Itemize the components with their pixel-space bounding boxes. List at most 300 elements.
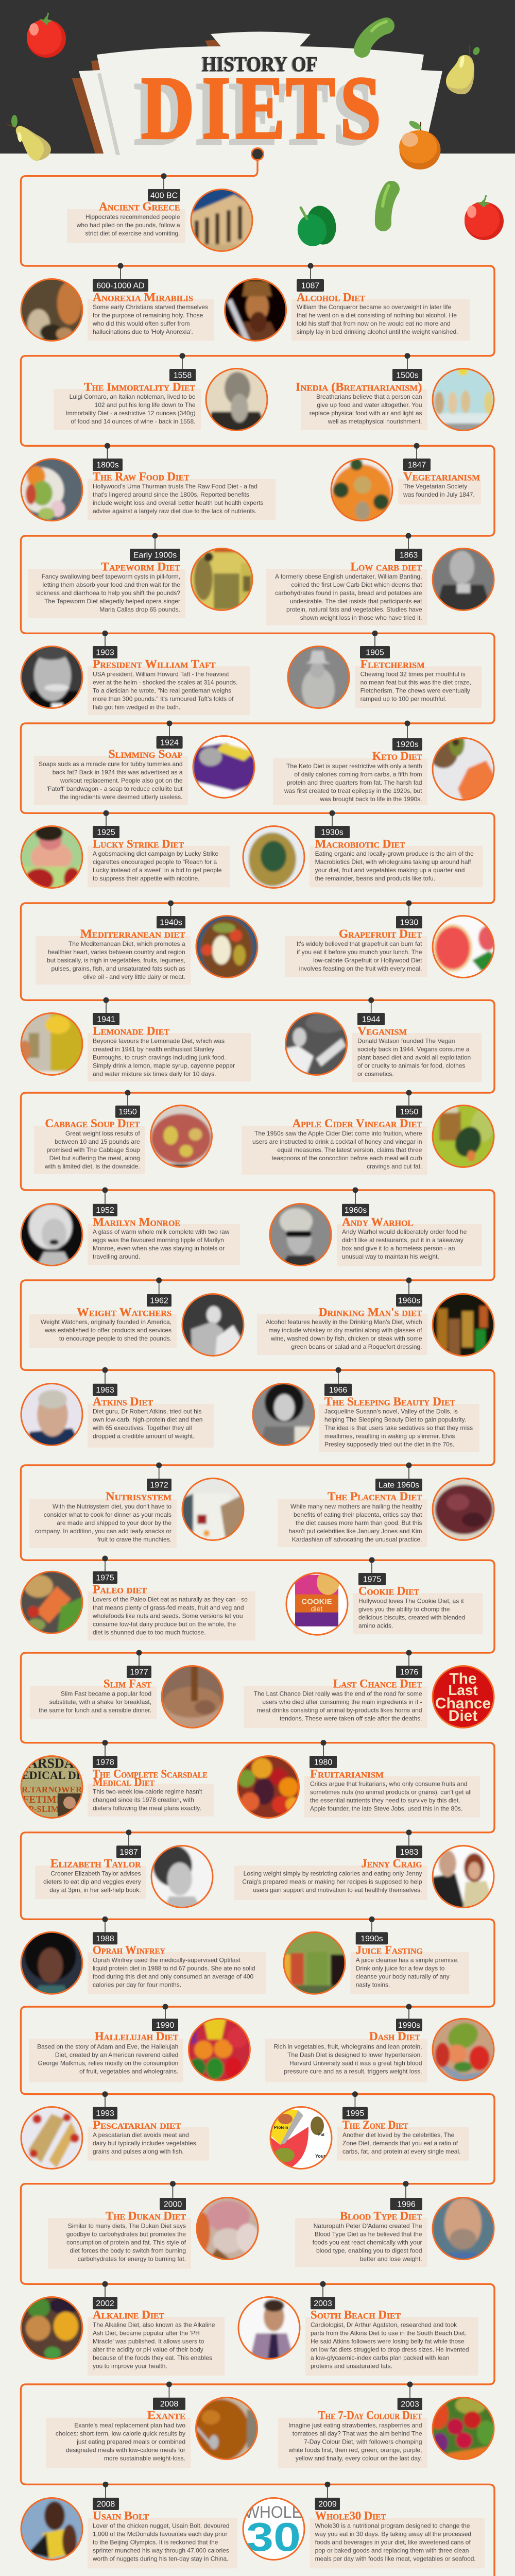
body text: Luigi Cornaro, an Italian nobleman, lived to be [70, 393, 196, 400]
dark header band [0, 0, 515, 154]
body text: It's widely believed that grapefruit can burn fat [297, 940, 422, 947]
body text: travelling around. [93, 1253, 140, 1260]
heading: Cookie Diet [358, 1584, 419, 1598]
entry: Vegetarianism [328, 443, 481, 524]
body text: back fat? Back in 1924 this was advertised as a [53, 769, 183, 776]
heading: Dash Diet [369, 2030, 420, 2043]
text panel [242, 1126, 427, 1175]
date: 2003: 2003 [401, 2400, 419, 2409]
body text: calories per day for four months. [93, 1981, 181, 1988]
body text: William the Conqueror became so overweight in later life [297, 303, 451, 311]
heading: The Raw Food Diet [93, 470, 190, 484]
date: 2008 [93, 2482, 119, 2510]
photo: plate diagram: Your [315, 2154, 325, 2159]
heading: Vegetarianism [403, 470, 480, 484]
body text: involves feasting on the fruit with every meal. [299, 965, 422, 972]
body text: for the purpose of remaining holy. Those [93, 312, 203, 319]
body text: company. In addition, you can add leafy snacks or [35, 1528, 171, 1535]
body text: to suppress their appetite with nicotine. [93, 875, 199, 882]
body text: include weight loss and overall better health but health experts [93, 499, 264, 506]
body text: strict diet of exercise and vomiting. [85, 230, 180, 237]
entry: Weight Watchers [29, 1278, 247, 1360]
date: 1963 [93, 1367, 117, 1396]
entry: Juice Fasting [280, 1917, 469, 1998]
body text: eggs was the favoured morning tipple of Marilyn [93, 1236, 224, 1244]
body text: meals per day with foods like meat, vegetables or seafood. [315, 2555, 476, 2563]
body text: plant-based diet and avoid all exploitation [357, 1054, 471, 1061]
date: 1925: 1925 [97, 828, 115, 837]
text panel [88, 1952, 266, 1994]
icon: tomato [27, 13, 66, 58]
text panel [88, 2127, 209, 2161]
body text: The Alkaline Diet, also known as the Alkaline [93, 2321, 215, 2329]
heading: Lemonade Diet [93, 1024, 169, 1038]
text panel [398, 479, 481, 504]
photo: William Taft [21, 646, 83, 709]
body text: helping The Sleeping Beauty Diet to gain popularity. [324, 1416, 466, 1423]
heading: Paleo diet [93, 1583, 147, 1596]
body text: To a dietician he wrote, "No real gentleman weighs [93, 687, 231, 694]
photo: Whole30 logo: WHOLE [245, 2503, 302, 2521]
photo: Cookie Diet pack: diet [311, 1605, 322, 1613]
heading: Blood Type Diet [340, 2209, 422, 2223]
body text: ever at the helm - shocked the scales at 314 pounds. [93, 679, 238, 686]
body text: pressure cure and as a result, triggers weight loss. [284, 2067, 422, 2075]
date: 1087: 1087 [301, 281, 319, 291]
body text: the remainder, beans and products like tofu. [315, 875, 435, 882]
entry: Mediterranean Diet [36, 901, 261, 985]
body text: Zone Diet, demands that you eat a ratio of [342, 2140, 458, 2147]
body text: but basically, is high in vegetables, fruits, legumes, [47, 957, 185, 964]
body text: your diet, fruit and vegetables making up a quarter and [315, 867, 465, 874]
date: 1996: 1996 [397, 2200, 416, 2209]
date: 1975 [358, 1557, 386, 1585]
date: 2002: 2002 [96, 2299, 114, 2308]
title banner [72, 32, 442, 163]
body text: Burroughs, to crush cravings including junk food. [93, 1054, 226, 1061]
heading: Mediterranean diet [80, 927, 185, 941]
entry: The Immortality Diet [54, 353, 271, 434]
body text: sprinter munched his way through 47,000 calories [93, 2547, 229, 2554]
body text: hasn't put celebrities like January Jones and Kim [288, 1528, 422, 1535]
entry: Tapeworm Diet [28, 533, 256, 618]
body text: flab got him wedged in the bath. [93, 704, 180, 711]
body text: Lucky instead of a sweet" in a bid to get people [93, 867, 222, 874]
entry: Elizabeth Taylor [35, 1829, 216, 1911]
body text: diet forces the body to switch from burning [70, 2247, 186, 2254]
body text: sickness and diarrhoea to help you shift the pounds? [36, 589, 180, 597]
date: 1995 [342, 2091, 368, 2120]
body text: you to improve your health. [93, 2363, 167, 2370]
heading: Exante [147, 2409, 185, 2422]
body text: that's lingered around since the 1800s. Reported benefits [93, 491, 249, 498]
text panel [28, 569, 185, 618]
entry: Paleo Diet [18, 1556, 255, 1640]
body text: the diet causes more harm than good. But this [296, 1519, 422, 1527]
body text: Cardiologist, Dr Arthur Agatston, researched and took [311, 2321, 457, 2329]
body text: Harvard University said it was a great high blood [289, 2059, 422, 2066]
date: 1905: 1905 [366, 648, 384, 657]
text panel [88, 299, 214, 341]
date: 1930: 1930 [400, 918, 418, 927]
text panel [265, 2039, 427, 2082]
entry: Inedia [296, 353, 497, 434]
body text: Monroe, even when she was staying in hotels or [93, 1245, 225, 1252]
photo: plate diagram: Fat [318, 2132, 324, 2137]
body text: letting them absorb your food and then wait for the [42, 581, 180, 588]
body text: Similar to many diets, The Dukan Diet says [68, 2222, 186, 2229]
text panel [88, 1784, 214, 1817]
entry: Slimming Soap [34, 720, 258, 805]
photo: salad bowl [21, 458, 83, 521]
date: Early 1900s [130, 533, 180, 561]
body text: dieters following the meal plans exactly. [93, 1805, 201, 1812]
date: 1940s [157, 901, 185, 928]
photo: Luigi Cornaro [205, 368, 268, 431]
body text: changed since its 1978 creation, with [93, 1797, 194, 1804]
text panel [29, 2039, 183, 2082]
body text: liquid protein diet in 1988 to rid 67 pounds. She ate no solid [93, 1964, 255, 1972]
body text: 'Fatoff' bandwagon - a soap to reduce cellulite but [47, 785, 183, 792]
body text: healthier heart, varies between country and region [48, 948, 185, 956]
date: 1990 [152, 2004, 178, 2031]
date: 1558 [169, 353, 196, 381]
body text: created in 1941 by health enthusiast Stanley [93, 1045, 214, 1053]
body text: promised with The Cabbage Soup [46, 1146, 140, 1154]
text panel [273, 758, 427, 805]
heading: Drinking Man's diet [319, 1306, 422, 1319]
icon: pear left [7, 115, 51, 161]
body text: Alcohol features heavily in the Drinking Man's Diet, which [266, 1318, 422, 1326]
heading: Weight Watchers [77, 1306, 171, 1319]
photo: book cover: EP-SLIM [23, 1804, 59, 1814]
heading: The Sleeping Beauty Diet [324, 1395, 455, 1409]
entry: Ancient Greece [67, 173, 256, 255]
text panel [353, 1593, 483, 1634]
photo: book cover: EDICAL DIET [22, 1769, 96, 1782]
body text: Beyoncé favours the Lemonade Diet, which was [93, 1037, 225, 1044]
photo: Donald Watson [282, 1009, 351, 1079]
entry: Cookie Diet [283, 1557, 483, 1639]
date: 2009: 2009 [318, 2500, 337, 2509]
body text: didn't like at restaurants, put it in a takeaway [342, 1236, 464, 1244]
text panel [319, 1404, 479, 1452]
heading: Low carb diet [350, 560, 422, 573]
body text: foods and beverages in your diet, like sweetened cans of [315, 2539, 471, 2546]
body text: Macrobiotics Diet, with wholegrains taking up around half [315, 858, 471, 866]
entry: Fruitarianism [234, 1740, 480, 1822]
body text: yellow and finally, every colour on the last day. [296, 2455, 422, 2462]
body text: shown weight loss in those who have tried it. [300, 614, 422, 621]
date: 1847 [403, 443, 431, 471]
icon: green pepper [295, 203, 339, 249]
body text: sometimes nuts (no animal products or grains), can't get all [310, 1789, 472, 1796]
title: History of: HISTORY OF [202, 52, 318, 76]
icon: pear right [446, 45, 481, 94]
body text: well as metaphysical nourishment. [328, 418, 422, 425]
text panel [29, 1499, 177, 1548]
text panel [295, 2218, 427, 2267]
body text: Donald Watson founded The Vegan [357, 1037, 455, 1044]
body text: and water mixture six times daily for 10 days. [93, 1070, 216, 1077]
photo: book cover: Chance [435, 1695, 491, 1712]
heading: Lucky Strike Diet [93, 837, 184, 851]
text panel [337, 1224, 482, 1266]
text panel [67, 209, 185, 243]
photo: Cookie Diet pack: COOKIE [301, 1598, 332, 1606]
body text: dairy but typically includes vegetables, [93, 2140, 198, 2147]
body text: ramped up to 100 per mouthful. [360, 696, 447, 703]
body text: 102 and put his long life down to The [95, 401, 196, 409]
body text: white foods first, then red, green, orange, purple, [288, 2447, 422, 2454]
title: Diets: DIETS [134, 63, 374, 163]
body text: delicious biscuits, created with blended [358, 1614, 465, 1621]
date: 1978: 1978 [96, 1758, 114, 1767]
entry: Whole30 Diet [239, 2482, 485, 2568]
body text: consider what to cook for dinner as your meals [44, 1511, 171, 1518]
text panel [350, 1952, 469, 1994]
heading: Grapefruit Diet [339, 927, 422, 941]
body text: 1,000 of the McDonalds favourites each day prior [93, 2531, 227, 2538]
body text: the ingredients were deemed utterly useless. [60, 793, 182, 801]
body text: meat drinks consisting of animal by-products likes horns and [257, 1707, 422, 1714]
body text: foods you eat react chemically with your [313, 2239, 422, 2246]
photo: Nutrisystem pack [179, 1475, 247, 1544]
body text: no mean feat but this was the diet craze, [360, 679, 471, 686]
body text: with a limited diet, is the downside. [44, 1163, 140, 1170]
body text: who had piled on the pounds, follow a [76, 222, 180, 229]
text panel [35, 1866, 146, 1899]
body text: carbohydrates found in pasta, bread and potatoes are [275, 589, 422, 597]
date: 2003 [398, 2381, 422, 2410]
entry: Keto Diet [273, 720, 497, 805]
body text: mealtimes, resulting in waking up slimmer. Elvis [324, 1433, 455, 1440]
body text: Losing weight simply by restricting calories and eating only Jenny [244, 1870, 422, 1877]
body text: proteins and unsaturated fats. [311, 2363, 392, 2370]
heading: Slimming Soap [108, 748, 183, 761]
date: 1863 [395, 533, 422, 561]
body text: consume low-fat dairy produce but on the whole, the [93, 1620, 236, 1628]
date: 1903: 1903 [96, 648, 114, 657]
date: 1983 [396, 1829, 422, 1858]
heading: President William Taft [93, 658, 216, 671]
entry: Alcohol Diet [221, 263, 470, 345]
body text: wine, washed down by fish, chicken or steak with some [270, 1335, 422, 1342]
date: 1930 [396, 901, 422, 928]
photo: cabbage soup [147, 1101, 215, 1171]
body text: workout replacement. People also got on the [60, 777, 183, 784]
date: 1993 [93, 2091, 117, 2120]
text panel [257, 1314, 427, 1355]
icon: orange [399, 119, 441, 170]
date: 1976: 1976 [400, 1668, 418, 1676]
body text: to the Beijing Olympics. It is reckoned that the [93, 2539, 218, 2546]
date: 1990s [396, 2004, 422, 2031]
heading: Jenny Craig [362, 1857, 422, 1871]
date: 600-1000 AD: 600-1000 AD [96, 281, 145, 291]
date: 1966: 1966 [329, 1386, 347, 1395]
entry: The Raw Food Diet [18, 443, 276, 524]
body text: advise against a largely raw diet due to the lack of nutrients. [93, 507, 256, 515]
heading: Tapeworm Diet [101, 560, 180, 573]
entry: President William Taft [18, 631, 250, 715]
title: Diets: DIETS [141, 58, 381, 158]
body text: While many new mothers are hailing the healthy [290, 1503, 422, 1510]
icon: cucumber [362, 22, 386, 49]
heading: Anorexia Mirabilis [93, 291, 193, 304]
body text: The Mediterranean Diet, which promotes a [68, 940, 185, 947]
date: 1960s [396, 1278, 422, 1307]
photo: book cover: ARSDAL [28, 1756, 83, 1771]
text panel [278, 1499, 427, 1547]
body text: A gobsmacking diet campaign by Lucky Strike [93, 850, 218, 857]
body text: worth of nuggets during his ten-day stay in China. [92, 2555, 228, 2563]
date: 1975: 1975 [96, 1573, 114, 1583]
body text: Breatharians believe that a person can [316, 393, 422, 400]
body text: The Dash Diet is designed to lower hypertension. [287, 2051, 422, 2058]
body text: Another diet loved by the celebrities, The [342, 2131, 455, 2139]
text panel [352, 1033, 482, 1082]
date: 1987: 1987 [119, 1848, 138, 1857]
entry: The Sleeping Beauty Diet [249, 1367, 479, 1452]
photo: tapeworm poster [191, 548, 253, 611]
body text: Ash Diet, became popular after the 'PH [93, 2330, 200, 2337]
heading: Veganism [357, 1024, 407, 1038]
date: 1995: 1995 [346, 2109, 364, 2118]
heading: Elizabeth Taylor [50, 1857, 141, 1871]
body text: Fancy swallowing beef tapeworm cysts in pill-form, [42, 573, 180, 580]
photo: meat [193, 2194, 262, 2263]
body text: the essential nutrients they need to survive by this diet. [310, 1797, 460, 1804]
entry: The 7-Day Colour Diet [278, 2381, 497, 2468]
entry: Oprah Winfrey [18, 1917, 266, 1998]
photo: Oprah Winfrey [18, 1928, 86, 1998]
body text: substitute, with a shake for breakfast, [49, 1699, 151, 1706]
photo: salmon and avocado [432, 737, 494, 801]
body text: because of the foods they eat. This enables [93, 2354, 212, 2362]
photo: Whole30 logo: 30 [246, 2514, 301, 2560]
date: 1924 [157, 720, 183, 749]
body text: Hollywood loves The Cookie Diet, as it [358, 1597, 464, 1604]
body text: George Malkmus, relies mostly on the consumption [38, 2059, 178, 2066]
heading: Whole30 Diet [315, 2509, 386, 2522]
date: 1983: 1983 [400, 1848, 418, 1857]
heading: Alcohol Diet [297, 291, 365, 304]
photo: Robert Atkins [18, 1380, 86, 1449]
date: 1996 [390, 2181, 422, 2210]
body text: of fruit, vegetables and wholegrains. [79, 2067, 178, 2075]
entry: Low Carb Diet [266, 533, 497, 625]
body text: protein, natural fats and vegetables. Studies have [286, 606, 422, 613]
text panel [54, 389, 201, 430]
photo: colourful vegetables [428, 2394, 497, 2463]
date: 2000: 2000 [164, 2200, 182, 2209]
body text: cravings and cut fat. [367, 1163, 422, 1170]
photo: plate diagram [267, 2103, 335, 2173]
body text: who did this would often suffer from [92, 320, 190, 327]
photo: lemonade pitcher [18, 1009, 86, 1079]
body text: Imagine just eating strawberries, raspberries and [288, 2422, 422, 2429]
photo: fish dish [18, 2103, 86, 2173]
body text: amino acids. [358, 1622, 393, 1629]
body text: designated meals with low-calorie meals for [66, 2447, 185, 2454]
text panel [244, 1686, 427, 1728]
body text: parts from the Atkins Diet to use in the South Beach Diet. [311, 2330, 467, 2337]
body text: was first created to treat epilepsy in the 1920s, but [284, 787, 422, 794]
photo: painting [21, 278, 83, 342]
body text: of food and 14 ounces of wine - back in 1558. [71, 418, 196, 425]
photo: liquor bottles [429, 1290, 497, 1360]
body text: A pescatarian diet avoids meat and [93, 2131, 189, 2139]
body text: alter the acidity or pH value of their body [93, 2346, 203, 2353]
entry: The Dukan Diet [48, 2181, 262, 2269]
body text: was established to offer products and services [44, 1327, 171, 1334]
heading: The Complete Scarsdale [93, 1768, 208, 1781]
body text: equal measures. The latest version, claims that three [277, 1146, 422, 1154]
date: 1905 [360, 631, 390, 658]
heading: The Dukan Diet [106, 2209, 186, 2223]
text panel [36, 936, 191, 985]
body text: grains and pulses along with fish. [93, 2148, 184, 2155]
date: 1960s [342, 1187, 369, 1216]
text panel [34, 1126, 145, 1174]
photo: mixed fruit [234, 1752, 303, 1822]
body text: replace physical food with air and light as [310, 410, 422, 417]
body text: The idea is that users take sedatives so that they miss [324, 1425, 473, 1432]
entry: Veganism [282, 997, 482, 1082]
date: 1920s: 1920s [396, 740, 419, 749]
body text: between 10 and 15 pounds are [55, 1138, 140, 1145]
body text: users who died after consuming the main ingredients in it - [262, 1699, 422, 1706]
date: 1950: 1950 [400, 1108, 418, 1116]
date: 1987 [116, 1829, 141, 1858]
heading: Fruitarianism [310, 1768, 384, 1781]
date: 1972: 1972 [150, 1481, 168, 1490]
body text: Some early Christians starved themselves [93, 303, 208, 311]
date: 1920s [392, 720, 422, 751]
photo: Arthur Agatston [235, 2293, 303, 2363]
body text: Based on the story of Adam and Eve, the Hallelujah [37, 2043, 178, 2050]
body text: undesirable. The diet insists that participants eat [290, 598, 422, 605]
date: 1962: 1962 [150, 1296, 168, 1306]
entry: South Beach Diet [235, 2281, 478, 2376]
body text: own low-carb, high-protein diet and then [93, 1416, 202, 1423]
heading: Juice Fasting [356, 1943, 423, 1957]
date: 2002 [93, 2281, 117, 2309]
text panel [337, 2127, 469, 2161]
body text: Exante's meal replacement plan had two [74, 2422, 185, 2429]
date: 1976 [396, 1650, 422, 1678]
heading: Slim Fast [104, 1677, 151, 1690]
photo: Lucky Strike advert [21, 825, 83, 889]
body text: Soaps suds as a miracle cure for tubby tummies and [39, 760, 182, 768]
heading: Keto Diet [372, 750, 422, 763]
date: 1980: 1980 [314, 1758, 332, 1767]
body text: With the Nutrisystem diet, you don't have to [53, 1503, 171, 1510]
body text: cigarettes encouraged people to "Reach for a [93, 858, 217, 866]
entry: Alkaline Diet [18, 2281, 225, 2376]
photo: Parthenon [191, 189, 253, 252]
body text: Jacqueline Susann's novel, Valley of the Dolls, is [324, 1408, 458, 1415]
photo: book cover: Diet [449, 1707, 477, 1724]
body text: society back in 1944. Vegans consume a [357, 1045, 470, 1053]
body text: that he went on a diet consisting of nothing but alcohol. He [297, 312, 457, 319]
entry: Marilyn Monroe [18, 1187, 240, 1269]
heading: Alkaline Diet [93, 2309, 164, 2322]
body text: with 65 executives. Together they all [92, 1425, 192, 1432]
date: 1990: 1990 [156, 2021, 174, 2030]
body text: A formerly obese English undertaker, William Banting, [275, 573, 422, 580]
